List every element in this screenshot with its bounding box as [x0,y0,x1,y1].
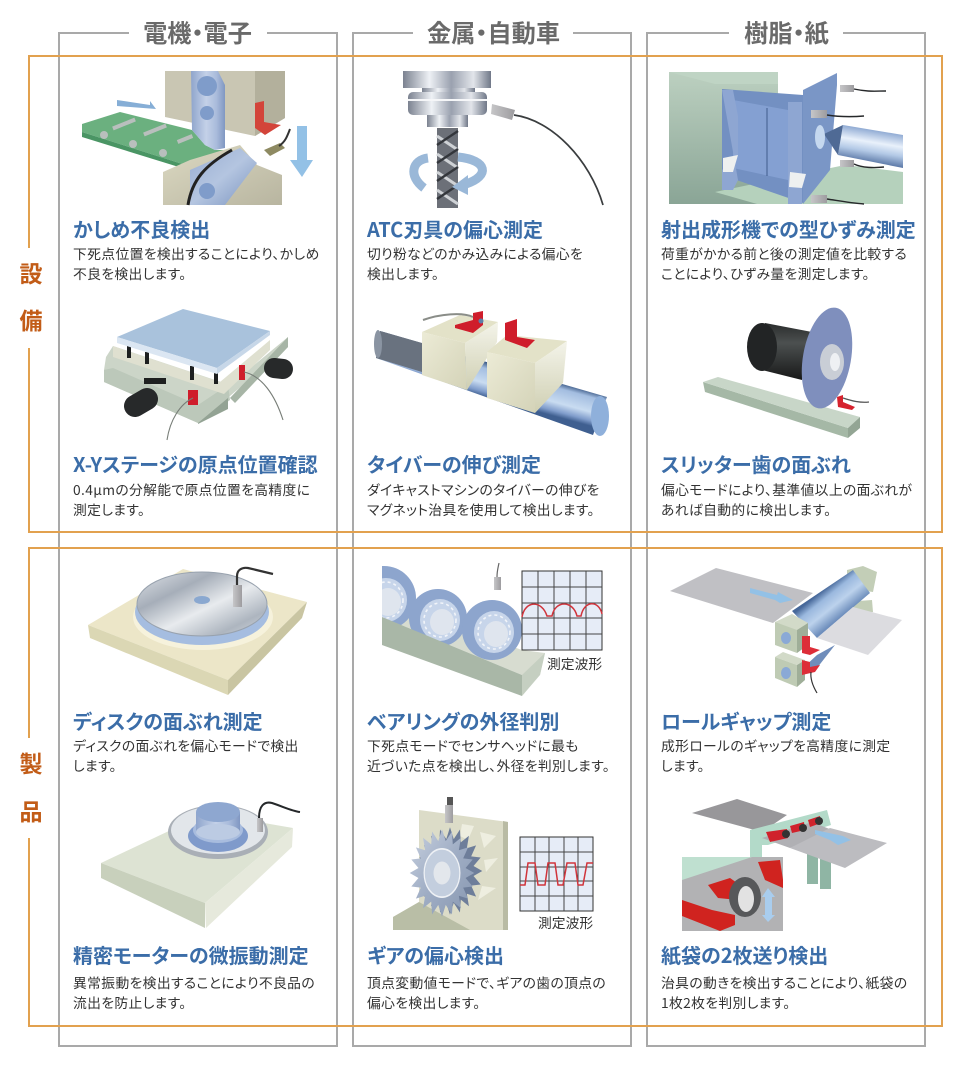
description: 0.4μmの分解能で原点位置を高精度に [73,479,310,499]
description: 成形ロールのギャップを高精度に測定 [661,735,891,755]
column heading: 金属・自動車: 金属・自動車 [427,14,560,49]
description: 治具の動きを検出することにより、紙袋の [661,972,907,992]
description: 下死点モードでセンサヘッドに最も [367,735,579,755]
description: 頂点変動値モードで、ギアの歯の頂点の [367,972,606,992]
description: します。 [661,755,705,775]
column heading: 電機・電子: 電機・電子 [143,14,252,49]
heading: ベアリングの外径判別 [367,706,559,735]
waveform caption: 測定波形 [547,653,602,673]
heading: ロールギャップ測定 [661,706,831,735]
panel: ATC刃具の偏心測定 [366,71,603,283]
description: 偏心を検出します。 [367,992,480,1012]
inset detail [682,857,783,931]
panel: ベアリングの外径判別 [352,563,610,775]
illustration: injection mold [669,72,903,204]
description: 測定します。 [73,499,145,519]
heading: X-Yステージの原点位置確認 [73,449,318,478]
illustration: bearings on rail with waveform [382,562,603,696]
panel: ディスクの面ぶれ測定 [73,568,307,775]
illustration: X-Y stage [104,309,288,440]
description: 切り粉などのかみ込みによる偏心を [367,243,583,263]
illustration: motor on base [101,802,300,928]
heading: かしめ不良検出 [73,214,210,243]
heading: タイバーの伸び測定 [367,449,541,478]
column heading: 樹脂・紙: 樹脂・紙 [744,14,829,49]
panel: かしめ不良検出 [73,71,320,283]
column frame: 金属・自動車 [353,33,631,1046]
section frame: 製品 [29,548,942,1026]
panel: X-Yステージの原点位置確認 [73,309,318,519]
description: 1枚2枚を判別します。 [661,992,790,1012]
description: 異常振動を検出することにより不良品の [73,972,315,992]
section label: 製品: 製 [20,745,42,779]
heading: 精密モーターの微振動測定 [73,940,309,969]
description: あれば自動的に検出します。 [661,499,831,519]
heading: ATC刃具の偏心測定 [366,214,543,243]
illustration: disk on base [88,568,307,695]
heading: スリッター歯の面ぶれ [661,449,851,478]
panel: タイバーの伸び測定 [367,311,609,519]
illustration: paper bag feed [682,799,887,931]
illustration: tie bar with blocks [374,311,609,436]
description: します。 [73,755,117,775]
heading: ギアの偏心検出 [367,940,504,969]
panel: スリッター歯の面ぶれ [661,304,912,519]
description: 検出します。 [367,263,439,283]
panel: ロールギャップ測定 [661,566,902,775]
description: ダイキャストマシンのタイバーの伸びを [367,479,600,499]
description: 近づいた点を検出し、外径を判別します。 [367,755,610,775]
description: ことにより、ひずみ量を測定します。 [661,263,870,283]
waveform caption: 測定波形 [538,912,593,932]
section label: 設備: 設 [20,255,42,289]
section label: 設備 [20,255,42,336]
section label: 製品: 品 [20,793,42,827]
column frame: 電機・電子 [59,33,337,1046]
description: 下死点位置を検出することにより、かしめ [73,243,320,263]
heading: 射出成形機での型ひずみ測定 [661,214,916,243]
panel: ギアの偏心検出 [367,797,606,1012]
description: 荷重がかかる前と後の測定値を比較する [661,243,907,263]
heading: 紙袋の2枚送り検出 [661,940,828,969]
illustration: crimping press [82,71,313,205]
description: 不良を検出します。 [73,263,186,283]
section label: 設備: 備 [20,302,42,336]
panel: 紙袋の2枚送り検出 [661,799,907,1012]
description: 流出を防止します。 [73,992,186,1012]
heading: ディスクの面ぶれ測定 [73,706,263,735]
panel: 精密モーターの微振動測定 [73,802,315,1012]
illustration: roll gap [670,566,902,693]
waveform chart [520,837,593,911]
panel: 射出成形機での型ひずみ測定 [661,72,916,283]
waveform chart [522,571,602,650]
column frame: 樹脂・紙 [647,33,925,1046]
description: マグネット治具を使用して検出します。 [367,499,595,519]
section label: 製品 [20,745,42,827]
illustration: gear with waveform [393,797,593,932]
section frame: 設備 [29,56,942,532]
illustration: slitter disc [703,304,869,438]
description: ディスクの面ぶれを偏心モードで検出 [73,735,299,755]
illustration: spindle and drill [403,71,603,208]
description: 偏心モードにより、基準値以上の面ぶれが [661,479,912,499]
